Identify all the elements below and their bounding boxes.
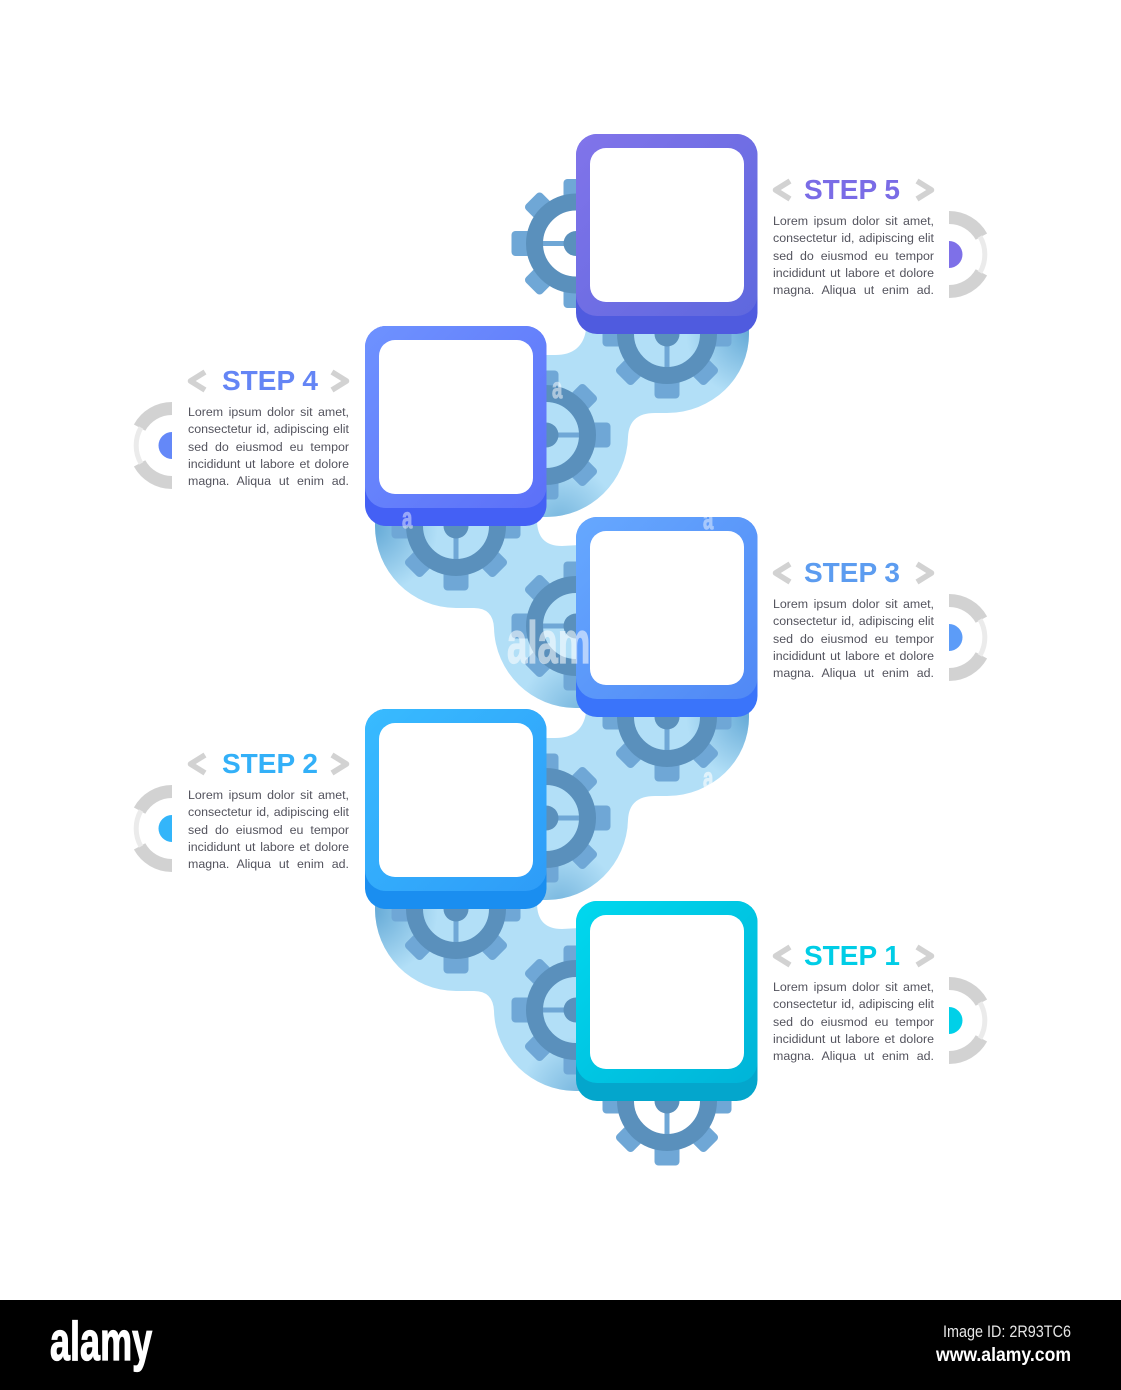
icon: gear below step 1 [602,1036,732,1166]
chevrons and donut: step 1 [772,944,988,1064]
icon: gear right of step 4 [482,370,610,500]
text: step 3 body: magna. Aliqua ut enim ad. [773,666,934,680]
text: step 4 body [188,405,349,488]
text: step 1 body: incididunt ut labore et dolore [773,1032,934,1046]
text: step 1 body: Lorem ipsum dolor sit amet, [773,980,934,994]
icon: gear below step 2 [392,844,520,974]
icon: gear left of step 5 [512,179,640,308]
blob: connects step 4 to step 3 [375,522,580,708]
text: step 4 body: sed do eiusmod eu tempor [188,440,349,454]
icon: gear left of step 3 [512,562,640,690]
chevrons and donut: step 4 [134,370,350,489]
footer logo: alamy [50,1310,152,1372]
text: step 3 body: sed do eiusmod eu tempor [773,632,934,646]
text: step 5 body [773,214,934,297]
icon: gear below step 4 [392,462,520,590]
panel: step 2 text [134,748,350,872]
footer image id: Image ID: 2R93TC6 [943,1322,1071,1341]
text: step 3 body [773,597,934,680]
text: step 4 body: consectetur id, adipiscing elit [188,422,349,436]
heading: step 4: STEP 4 [222,365,318,396]
panel: step 4 text [134,365,350,489]
card: step 2 [365,709,546,909]
text: step 1 body: consectetur id, adipiscing elit [773,997,934,1011]
text: step 5 body: consectetur id, adipiscing elit [773,231,934,245]
panel: step 3 text [772,557,988,681]
blob: connects step 5 to step 4 [542,330,749,517]
text: step 3 body: Lorem ipsum dolor sit amet, [773,597,934,611]
text: step 4 body: magna. Aliqua ut enim ad. [188,474,349,488]
text: step 3 body: incididunt ut labore et dolore [773,649,934,663]
text: step 2 body: incididunt ut labore et dolore [188,840,349,854]
watermark marks: a [703,503,714,536]
watermark marks [402,372,714,795]
footer bar [0,1300,1121,1390]
heading: step 5: STEP 5 [804,174,900,205]
card: step 4 [365,326,546,526]
heading: step 1: STEP 1 [804,940,900,971]
text: step 5 body: sed do eiusmod eu tempor [773,249,934,263]
card: step 1 [576,901,758,1101]
watermark marks: a [402,502,413,535]
text: step 1 body [773,980,934,1063]
footer url: www.alamy.com [935,1345,1071,1366]
text: step 1 body: magna. Aliqua ut enim ad. [773,1049,934,1063]
blob: connects step 2 to step 1 [375,906,580,1091]
heading: step 2: STEP 2 [222,748,318,779]
chevrons and donut: step 5 [772,178,988,298]
text: step 4 body: Lorem ipsum dolor sit amet, [188,405,349,419]
icon: gear below step 5 [602,270,732,398]
chevrons and donut: step 3 [772,562,988,681]
chevrons and donut: step 2 [134,752,350,872]
text: step 2 body: sed do eiusmod eu tempor [188,823,349,837]
panel: step 1 text [772,940,988,1064]
watermark marks: alam [507,611,590,676]
text: step 3 body: consectetur id, adipiscing elit [773,614,934,628]
text: step 2 body: magna. Aliqua ut enim ad. [188,857,349,871]
text: step 2 body: consectetur id, adipiscing elit [188,805,349,819]
text: step 5 body: magna. Aliqua ut enim ad. [773,283,934,297]
icon: gear below step 3 [602,652,732,782]
text: step 4 body: incididunt ut labore et dolore [188,457,349,471]
text: step 5 body: Lorem ipsum dolor sit amet, [773,214,934,228]
icon: gear right of step 2 [482,754,610,882]
text: step 2 body: Lorem ipsum dolor sit amet, [188,788,349,802]
watermark marks: a [552,372,563,405]
heading: step 3: STEP 3 [804,557,900,588]
card: step 3 [576,517,758,717]
watermark marks: a [703,762,714,795]
text: step 2 body [188,788,349,871]
panel: step 5 text [772,174,988,298]
text: step 5 body: incididunt ut labore et dolore [773,266,934,280]
diagram: gears, blobs and cards [365,134,758,1166]
icon: gear left of step 1 [512,946,640,1074]
blob: connects step 3 to step 2 [542,713,749,900]
text: step 1 body: sed do eiusmod eu tempor [773,1015,934,1029]
card: step 5 [576,134,758,334]
